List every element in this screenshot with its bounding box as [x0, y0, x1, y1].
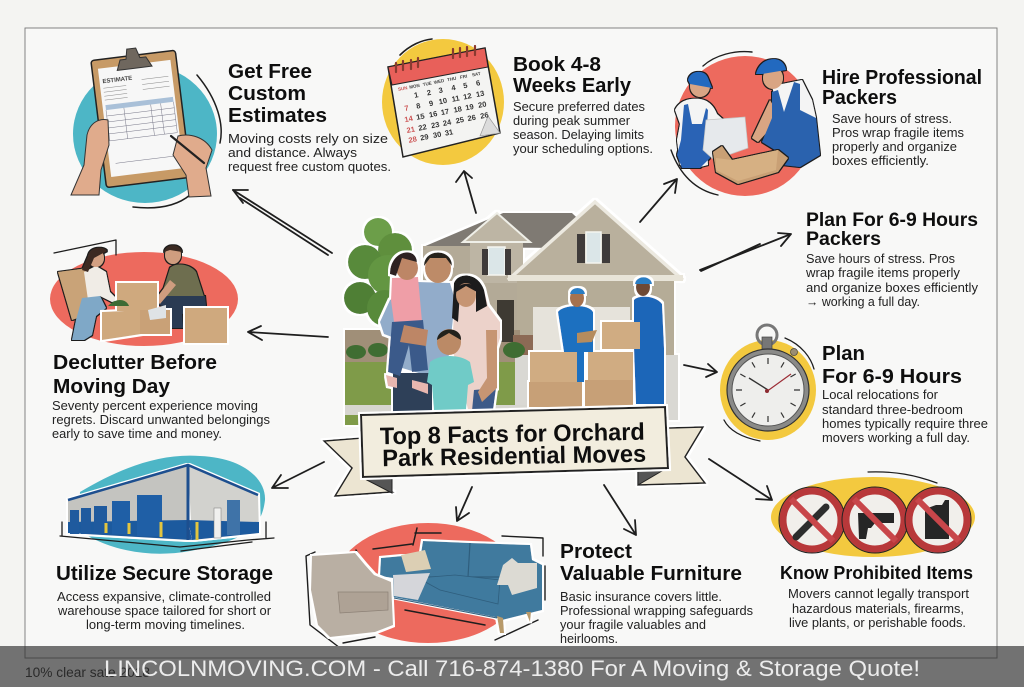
- heading: plan for 6-9 hours: [822, 343, 962, 388]
- text: declutter description: [52, 399, 270, 441]
- icon: wall calendar: 18: [453, 104, 463, 115]
- heading: get free custom estimates: Estimates: [228, 105, 327, 127]
- woman: [452, 277, 500, 410]
- boy: [427, 356, 474, 410]
- panel: protect valuable furniture: [306, 523, 753, 648]
- banner main: [361, 407, 668, 477]
- text: declutter description: Seventy percent experience moving: [52, 399, 258, 413]
- text: plan packers description: [805, 252, 979, 309]
- icon: wall calendar: 16: [428, 109, 438, 119]
- text: furniture description: Basic insurance covers little.: [560, 590, 722, 604]
- text: booking description: [513, 100, 653, 156]
- text: furniture description: [560, 590, 753, 646]
- heading: plan for 6-9 hours: For 6-9 Hours: [822, 366, 962, 388]
- icon: wall calendar: 31: [444, 127, 454, 138]
- movers and boxes: [529, 277, 664, 407]
- panel: plan for 6-9 hours: [720, 325, 988, 445]
- icon: armchair and blue sofa: [306, 523, 545, 648]
- heading: get free custom estimates: [228, 61, 327, 127]
- arrow: to calendar: [456, 171, 476, 213]
- icon: wall calendar: 14: [404, 114, 414, 124]
- arrow: to plan packers: [700, 233, 791, 271]
- icon: wall calendar: 15: [415, 111, 425, 122]
- text: plan packers description: Save hours of stress. Pros: [806, 252, 955, 266]
- left packer: [675, 99, 726, 168]
- sofa body: [380, 541, 542, 620]
- icon: wall calendar: 11: [451, 93, 460, 104]
- heading: plan for 6-9 hours packers: Packers: [806, 229, 881, 250]
- icon: wall calendar: 1: [413, 90, 419, 100]
- icon: wall calendar: 13: [475, 89, 485, 99]
- icon: wall calendar: 3: [438, 85, 444, 95]
- heading: get free custom estimates: Custom: [228, 83, 306, 105]
- banner left tail: [324, 438, 392, 496]
- icon: wall calendar: SAT: [472, 71, 481, 77]
- arrow: to sofa: [456, 487, 472, 521]
- man: [160, 265, 205, 303]
- man: [380, 282, 455, 374]
- text: storage description: warehouse space tailored for short or: [57, 604, 271, 618]
- arrow: to declutter: [248, 326, 328, 340]
- panel: know prohibited items: [771, 472, 975, 630]
- icon: wall calendar: 24: [442, 117, 453, 128]
- text: prohibited items description: [788, 587, 970, 630]
- text: prohibited items description: Movers cannot legally transport: [788, 587, 970, 601]
- icon: wall calendar: THU: [447, 76, 457, 82]
- icon: wall calendar: 20: [477, 99, 487, 110]
- text: estimates description: Moving costs rely on size: [228, 132, 388, 146]
- icon: wall calendar: SUN: [398, 85, 408, 92]
- panel: plan for 6-9 hours packers: [805, 210, 979, 309]
- heading: plan for 6-9 hours packers: [806, 210, 978, 250]
- girl: [391, 277, 422, 322]
- text: packers description: boxes efficiently.: [832, 154, 929, 168]
- panel: hire professional packers: [671, 52, 982, 196]
- heading: hire professional packers: Hire Professional: [822, 67, 982, 89]
- icon: wall calendar: 2: [426, 88, 432, 97]
- footer small print: 10% clear sate 2018: [25, 665, 150, 680]
- heading: book 4-8 weeks early: [513, 54, 632, 97]
- heading: protect valuable furniture: [560, 541, 742, 585]
- heading: book 4-8 weeks early: Weeks Early: [513, 75, 632, 97]
- banner right tail: [638, 427, 705, 485]
- icon: wall calendar: 28: [408, 134, 418, 145]
- heading: hire professional packers: Packers: [822, 87, 897, 109]
- text: packers description: Pros wrap fragile items: [832, 126, 964, 140]
- armchair: [311, 553, 393, 637]
- text: furniture description: your fragile valuables and: [560, 618, 706, 632]
- icon: wall calendar: 6: [475, 78, 481, 88]
- icon: wall calendar: 23: [430, 120, 440, 130]
- text: plan packers description: and organize boxes efficiently: [806, 281, 979, 295]
- arrow: to estimates: [233, 190, 332, 255]
- icon: wall calendar: TUE: [422, 80, 432, 87]
- banner folds: [363, 468, 667, 493]
- house: [423, 202, 683, 360]
- icon: clipboard with estimate form and hands: [71, 43, 221, 208]
- icon: wall calendar: MON: [409, 83, 420, 90]
- text: declutter description: early to save time and money.: [52, 427, 222, 441]
- icon: wall calendar: 5: [462, 81, 468, 90]
- icon: wall calendar: FRI: [460, 74, 468, 80]
- icon: wall calendar: 25: [455, 115, 465, 125]
- icon: wall calendar: 21: [406, 125, 416, 135]
- icon: wall calendar: 17: [440, 107, 450, 117]
- text: packers description: properly and organize: [832, 140, 957, 154]
- central photo: family and movers in front of house: [344, 202, 683, 425]
- heading: know prohibited items: Know Prohibited Items: [780, 563, 973, 583]
- woman: [58, 268, 94, 320]
- heading: protect valuable furniture: Valuable Furniture: [560, 563, 742, 585]
- arrow: to packers: [640, 179, 677, 222]
- text: prohibited items description: live plants, or perishable foods.: [789, 616, 966, 630]
- text: booking description: during peak summer: [513, 114, 630, 128]
- icon: wall calendar: 7: [404, 103, 409, 113]
- text: booking description: season. Delaying limits: [513, 128, 644, 142]
- text: booking description: Secure preferred dates: [513, 100, 645, 114]
- footer band: [0, 646, 1024, 687]
- panel: get free custom estimates: [71, 43, 391, 208]
- text: storage description: [57, 590, 271, 632]
- text: plan packers description: → working a full day.: [806, 295, 920, 309]
- icon: wall calendar: 10: [438, 96, 448, 106]
- text: plan hours description: movers working a full day.: [822, 431, 970, 445]
- icon: stopwatch: [720, 325, 816, 441]
- icon: three prohibition signs: [771, 472, 975, 557]
- family: [380, 252, 500, 413]
- heading: hire professional packers: [822, 67, 982, 109]
- arrow: to furniture: [604, 485, 636, 535]
- icon: wall calendar: WED: [433, 78, 445, 85]
- text: booking description: your scheduling options.: [513, 142, 653, 156]
- panel: book 4-8 weeks early: [382, 39, 653, 165]
- icon: wall calendar: [382, 39, 504, 165]
- icon: wall calendar: 8: [415, 101, 421, 111]
- text: declutter description: regrets. Discard unwanted belongings: [52, 413, 270, 427]
- title text: Top 8 Facts for Orchard: [380, 419, 645, 450]
- text: furniture description: Professional wrapping safeguards: [560, 604, 753, 618]
- icon: couple sorting boxes: [50, 240, 238, 346]
- heading: protect valuable furniture: Protect: [560, 541, 632, 563]
- text: plan hours description: standard three-bedroom: [822, 403, 963, 417]
- text: storage description: long-term moving timelines.: [86, 618, 245, 632]
- text: furniture description: heirlooms.: [560, 632, 618, 646]
- heading: declutter before moving day: [53, 352, 217, 398]
- icon: clipboard with estimate form and hands: ESTIMATE: [102, 76, 133, 85]
- title banner: [324, 407, 705, 496]
- text: packers description: [832, 112, 964, 168]
- text: storage description: Access expansive, climate-controlled: [57, 590, 271, 604]
- heading: plan for 6-9 hours: Plan: [822, 343, 865, 365]
- text: plan hours description: Local relocations for: [822, 388, 938, 402]
- text: plan hours description: [822, 388, 988, 445]
- footer call to action: LINCOLNMOVING.COM - Call 716-874-1380 For A Moving & Storage Quote!: [104, 656, 920, 681]
- heading: plan for 6-9 hours packers: Plan For 6-9 Hours: [806, 210, 978, 231]
- text: estimates description: [228, 132, 391, 174]
- icon: wall calendar: 19: [465, 102, 474, 112]
- panel: utilize secure storage: [56, 456, 274, 632]
- tree: [344, 218, 412, 326]
- icon: wall calendar: 4: [451, 83, 457, 93]
- icon: wall calendar: 22: [418, 122, 427, 133]
- title text: [380, 419, 646, 472]
- heading: declutter before moving day: Moving Day: [53, 376, 171, 398]
- right packer: [772, 80, 816, 125]
- heading: declutter before moving day: Declutter Before: [53, 352, 217, 374]
- arrow: to prohibited items: [709, 459, 772, 500]
- arrow: to storage: [272, 462, 324, 488]
- icon: wall calendar: 29: [419, 132, 429, 142]
- lawn and driveway: [345, 330, 678, 425]
- text: plan packers description: wrap fragile items properly: [805, 266, 961, 280]
- heading: book 4-8 weeks early: Book 4-8: [513, 54, 601, 76]
- arrow: to stopwatch: [684, 364, 717, 377]
- icon: wall calendar: 30: [432, 130, 442, 140]
- panel: declutter before moving day: [50, 240, 270, 441]
- icon: wall calendar: 9: [428, 99, 434, 108]
- text: estimates description: request free custom quotes.: [228, 160, 391, 174]
- heading: utilize secure storage: Utilize Secure Storage: [56, 563, 273, 585]
- text: packers description: Save hours of stress.: [832, 112, 952, 126]
- icon: storage warehouse: [60, 456, 274, 554]
- text: estimates description: and distance. Always: [228, 146, 357, 160]
- heading: get free custom estimates: Get Free: [228, 61, 312, 83]
- text: plan hours description: homes typically require three: [822, 417, 988, 431]
- icon: two packers wrapping a box: [671, 52, 820, 196]
- icon: wall calendar: 12: [462, 91, 472, 102]
- icon: wall calendar: 26: [479, 110, 489, 121]
- title text: Park Residential Moves: [382, 441, 646, 472]
- icon: wall calendar: 26: [467, 113, 477, 123]
- text: prohibited items description: hazardous materials, firearms,: [792, 602, 964, 616]
